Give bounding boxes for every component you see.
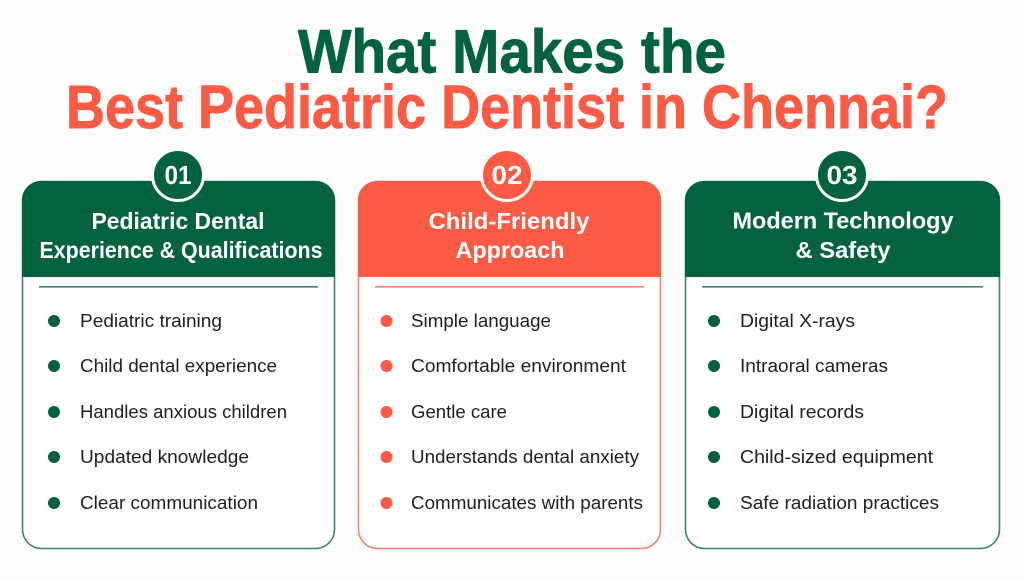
item list: Gentle care [411, 402, 507, 422]
panel header [22, 181, 335, 277]
item list: Intraoral cameras [740, 356, 888, 376]
item list: Child dental experience [80, 356, 277, 376]
item list: Communicates with parents [411, 493, 643, 513]
number badge 01 [152, 150, 204, 200]
panel heading [428, 208, 590, 263]
item list [708, 311, 939, 513]
number badge 01: 01 [164, 160, 192, 190]
item list: Simple language [411, 311, 551, 331]
number badge 02: 02 [492, 160, 522, 190]
panel heading [732, 208, 954, 263]
panel header [685, 181, 1000, 277]
item list: Pediatric training [80, 311, 222, 331]
title: What Makes the [298, 18, 726, 86]
item list [380, 311, 643, 513]
title [66, 18, 948, 141]
panel heading: Pediatric Dental [92, 208, 264, 234]
item list: Child-sized equipment [740, 447, 933, 467]
item list: Safe radiation practices [740, 493, 939, 513]
panel: modern technology and safety [685, 150, 1000, 548]
item list: Digital records [740, 402, 864, 422]
panel header [358, 181, 661, 277]
panel heading: Approach [456, 237, 564, 263]
panel heading: Modern Technology [732, 208, 954, 234]
item list: Handles anxious children [80, 402, 287, 422]
panel heading [40, 208, 322, 263]
item list: Digital X-rays [740, 311, 855, 331]
item list: Comfortable environment [411, 356, 626, 376]
item list: Clear communication [80, 493, 258, 513]
item list: Updated knowledge [80, 447, 249, 467]
panel: child-friendly approach [358, 150, 661, 548]
item list: Understands dental anxiety [411, 447, 639, 467]
panel heading: Experience & Qualifications [40, 237, 322, 263]
number badge 02 [482, 150, 532, 200]
panel: experience and qualifications [22, 150, 335, 548]
number badge 03 [816, 150, 868, 200]
item list [48, 311, 287, 513]
panel heading: Child-Friendly [428, 208, 590, 234]
panel heading: & Safety [796, 237, 891, 263]
number badge 03: 03 [826, 160, 858, 190]
